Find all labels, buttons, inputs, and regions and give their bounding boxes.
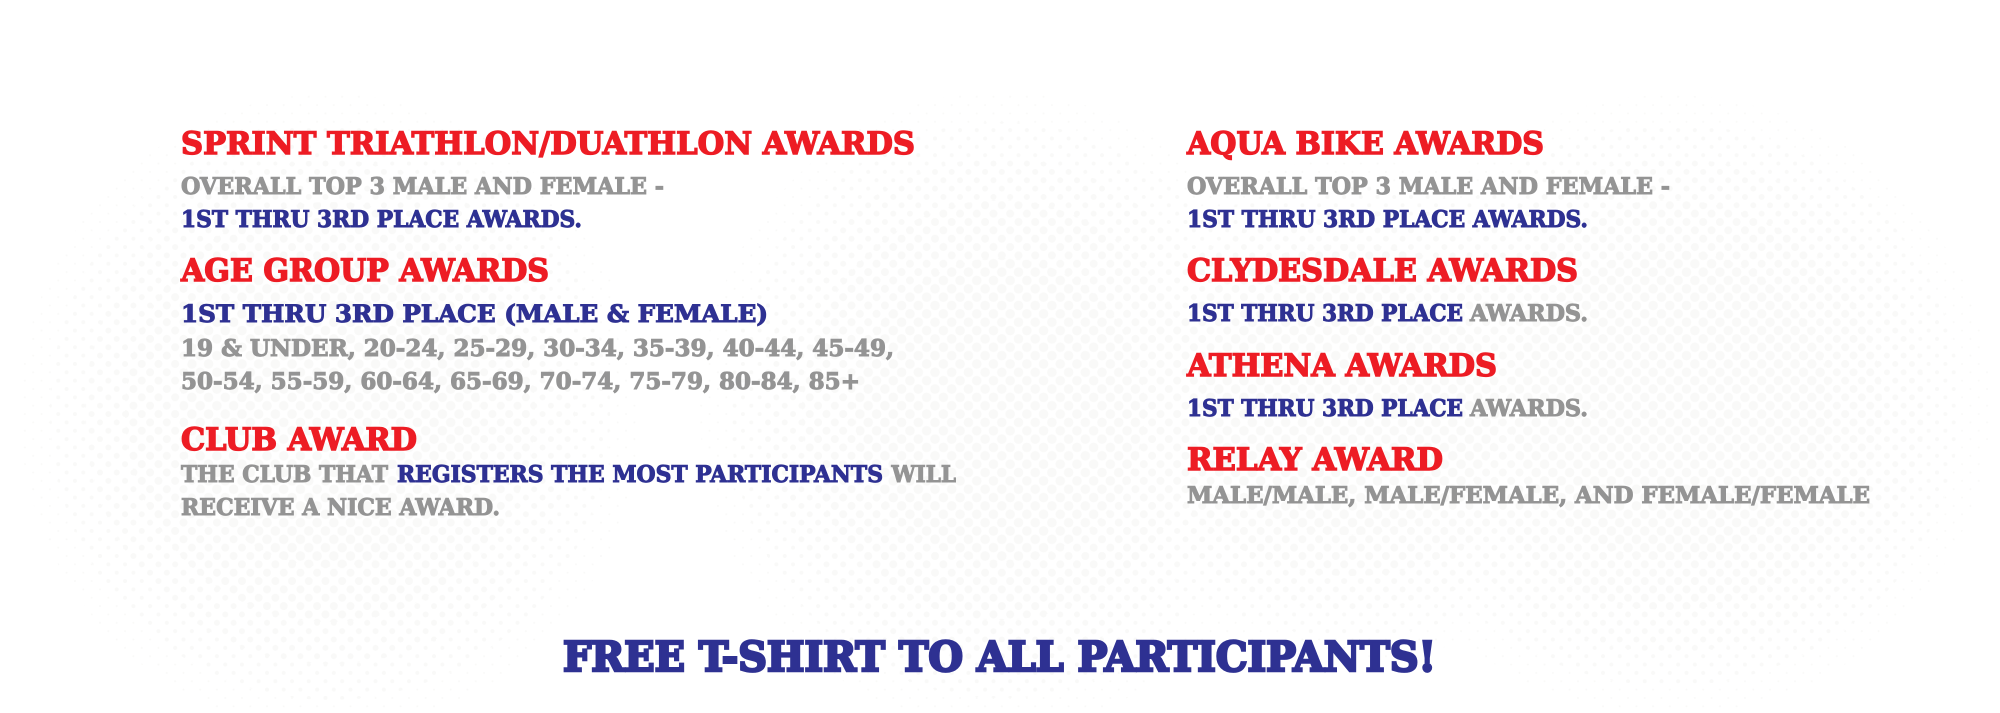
text: age groups line two: 50-54, 55-59, 60-64, 65-69, 70-74, 75-79, 80-84, 85+ — [181, 368, 860, 395]
text: overall top 3: OVERALL TOP 3 MALE AND FEMALE - — [181, 173, 664, 200]
text: club award description: REGISTERS THE MOST PARTICIPANTS — [397, 461, 883, 488]
panel: left column awards — [180, 126, 956, 521]
panel: right column awards — [1186, 126, 1870, 509]
text: overall top 3: OVERALL TOP 3 MALE AND FEMALE - — [1187, 173, 1670, 200]
heading: club award: CLUB AWARD — [181, 422, 417, 458]
heading: aqua bike awards: AQUA BIKE AWARDS — [1186, 126, 1544, 162]
text: age groups line one: 19 & UNDER, 20-24, 25-29, 30-34, 35-39, 40-44, 45-49, — [181, 335, 894, 362]
text: 1st thru 3rd place awards: 1ST THRU 3RD PLACE AWARDS. — [181, 206, 582, 233]
callout: free t-shirt: FREE T-SHIRT TO ALL PARTICIPANTS! — [563, 633, 1436, 681]
text: athena placing: AWARDS. — [1469, 395, 1588, 422]
text: clydesdale placing: AWARDS. — [1469, 300, 1588, 327]
text: 1st thru 3rd place male and female: 1ST THRU 3RD PLACE (MALE & FEMALE) — [181, 299, 768, 328]
text: clydesdale placing: 1ST THRU 3RD PLACE — [1187, 300, 1463, 327]
heading: age group awards: AGE GROUP AWARDS — [180, 253, 549, 289]
heading: relay award: RELAY AWARD — [1187, 442, 1443, 478]
text: club award description: THE CLUB THAT — [181, 461, 388, 488]
heading: athena awards: ATHENA AWARDS — [1186, 348, 1497, 384]
heading: sprint triathlon/duathlon awards: SPRINT TRIATHLON/DUATHLON AWARDS — [181, 126, 915, 162]
text: relay categories: MALE/MALE, MALE/FEMALE, AND FEMALE/FEMALE — [1187, 482, 1870, 509]
text: club award description: RECEIVE A NICE AWARD. — [181, 494, 500, 521]
heading: clydesdale awards: CLYDESDALE AWARDS — [1187, 253, 1578, 289]
text: club award description: WILL — [891, 461, 956, 488]
text: athena placing: 1ST THRU 3RD PLACE — [1187, 395, 1463, 422]
text: 1st thru 3rd place awards: 1ST THRU 3RD PLACE AWARDS. — [1187, 206, 1588, 233]
text: club award description — [181, 461, 956, 521]
